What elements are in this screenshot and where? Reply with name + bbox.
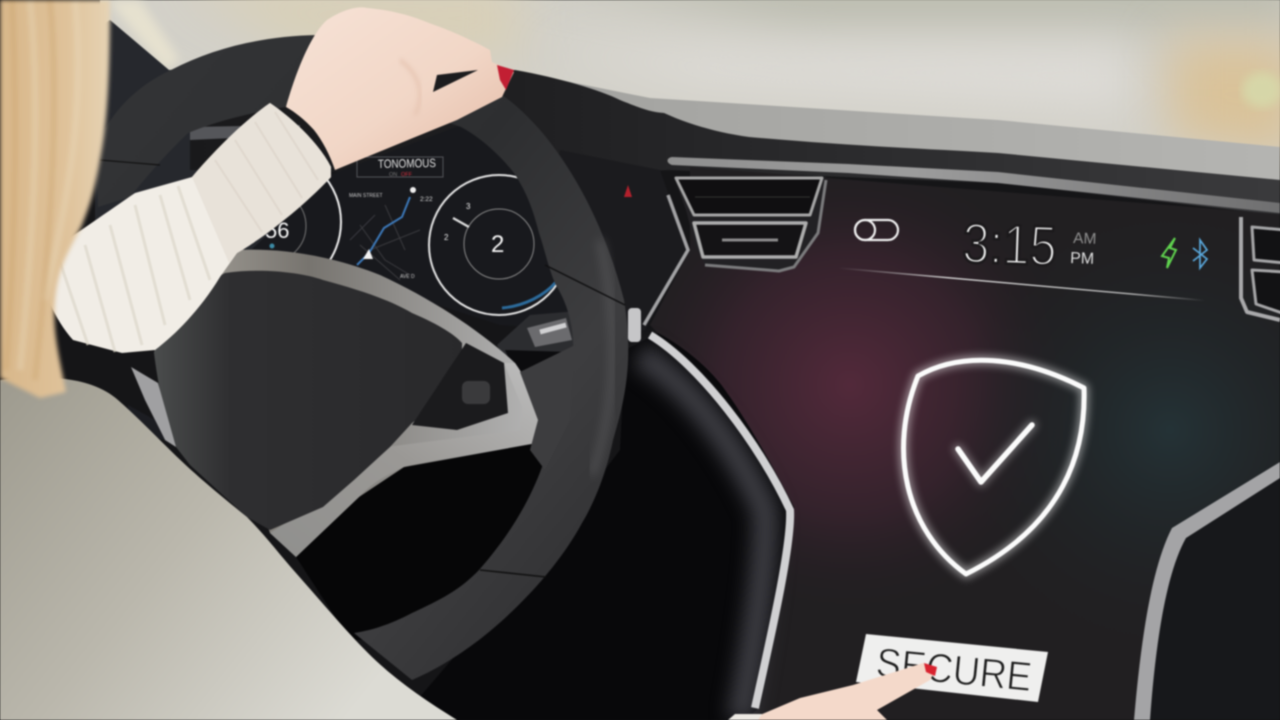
steering wheel rim	[96, 35, 628, 680]
hand on wheel	[286, 7, 514, 170]
left speed gauge: 56	[265, 218, 289, 243]
control button panel	[412, 343, 508, 430]
panel: touchscreen	[650, 167, 1280, 720]
dark void under steering hub	[296, 440, 560, 640]
slot strip behind wheel	[190, 125, 300, 140]
divider line	[838, 268, 1205, 300]
right gauge: 2	[491, 231, 504, 258]
hair	[0, 0, 110, 398]
autonomous sign: OFF	[401, 172, 413, 178]
left speed gauge	[199, 151, 341, 293]
airbag pad	[154, 271, 462, 530]
right gauge	[429, 175, 569, 315]
instrument cluster	[199, 125, 590, 330]
icon: warning light	[624, 185, 632, 197]
left silver trim	[131, 367, 176, 447]
clock: 3:15	[962, 211, 1058, 277]
icon: security shield with check	[904, 360, 1084, 574]
chrome strip	[668, 157, 1280, 213]
autonomous sign: TONOMOUS	[378, 156, 436, 171]
navigation map	[349, 187, 433, 280]
dark dash band	[190, 70, 1280, 215]
windshield pillar and cabin behind wheel	[95, 20, 320, 270]
air vent left	[674, 177, 826, 271]
dark panel right of wheel	[540, 150, 688, 340]
icon: green lightning bolt	[1162, 238, 1176, 268]
rim junction with spoke	[520, 345, 575, 470]
navigation map: MAIN STREET	[349, 193, 383, 199]
bezel trim	[644, 195, 688, 325]
navigation map: AVE D	[400, 274, 415, 280]
sleeve: raised arm	[37, 103, 331, 353]
scroll button	[462, 381, 490, 404]
right gauge: 2	[444, 233, 449, 242]
autonomous sign	[357, 156, 443, 178]
navigation map: 2:22	[420, 196, 433, 203]
air vent right	[1241, 217, 1280, 320]
hand pressing secure	[728, 663, 937, 720]
autonomous sign: ON	[389, 172, 397, 178]
clock: PM	[1070, 250, 1094, 268]
dashboard top	[190, 70, 1280, 215]
chrome ring at stalk	[628, 308, 641, 342]
secure button: SECURE	[874, 639, 1034, 700]
stalk and switch	[497, 310, 600, 378]
steering hub and spokes	[125, 250, 540, 557]
right gauge: 3	[466, 202, 471, 211]
sweater body	[0, 377, 457, 720]
toggle icon	[855, 220, 898, 240]
lower right padded panel	[1134, 462, 1280, 720]
centre console padded panel	[400, 333, 794, 720]
clock: AM	[1073, 230, 1097, 248]
icon: bluetooth	[1193, 240, 1207, 268]
light dash band	[560, 80, 1280, 190]
windshield view	[100, 0, 1280, 170]
silver spoke	[270, 363, 540, 557]
